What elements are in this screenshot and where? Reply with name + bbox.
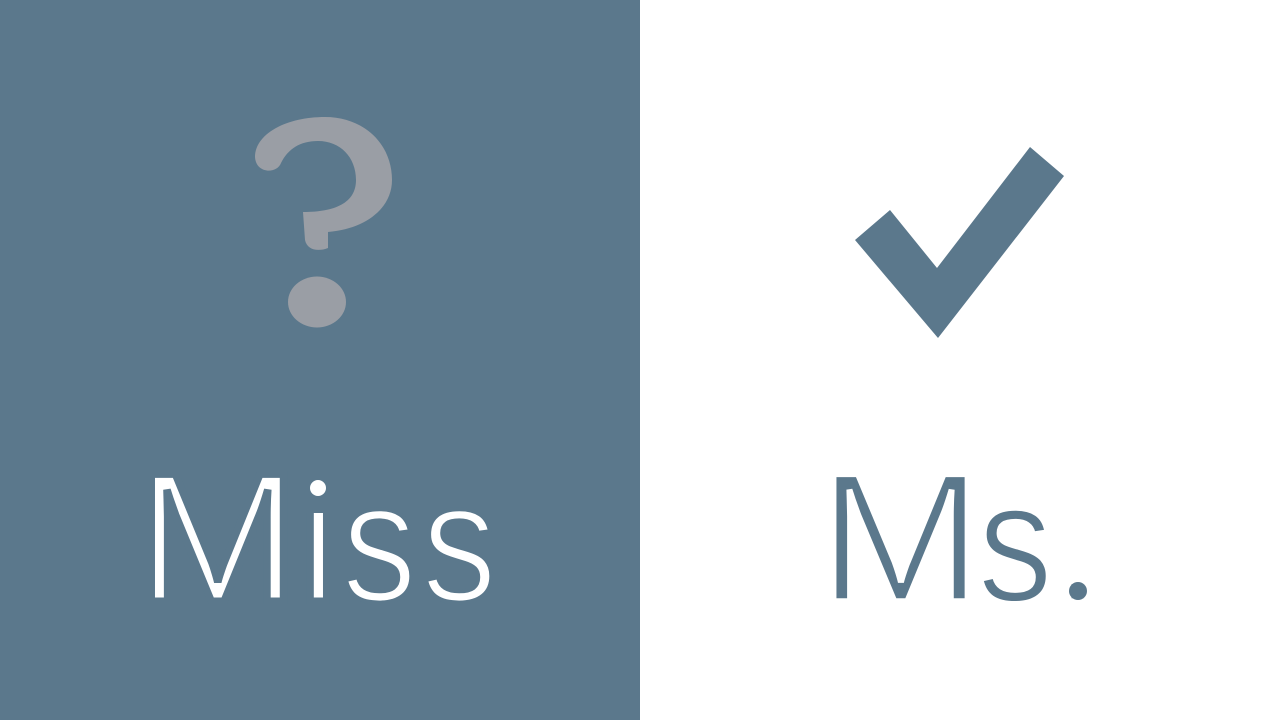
heading: Miss: M bbox=[135, 434, 300, 640]
panel: Ms. (right, correct) bbox=[640, 0, 1280, 720]
icon: dot of i bbox=[310, 480, 326, 496]
icon: question mark bbox=[255, 117, 392, 328]
heading: Ms.: . bbox=[1052, 434, 1103, 640]
heading: Ms. bbox=[816, 434, 1103, 640]
heading: Miss bbox=[135, 434, 497, 640]
heading: Ms.: s bbox=[978, 446, 1053, 637]
icon: period dot bbox=[1069, 582, 1087, 600]
heading: Miss: s bbox=[422, 446, 497, 637]
panel: Miss (left, incorrect) bbox=[0, 0, 640, 720]
heading: Ms.: M bbox=[816, 434, 984, 640]
icon: check mark bbox=[855, 147, 1064, 338]
heading: Miss: s bbox=[342, 446, 417, 637]
heading: Miss: i bbox=[298, 434, 339, 640]
